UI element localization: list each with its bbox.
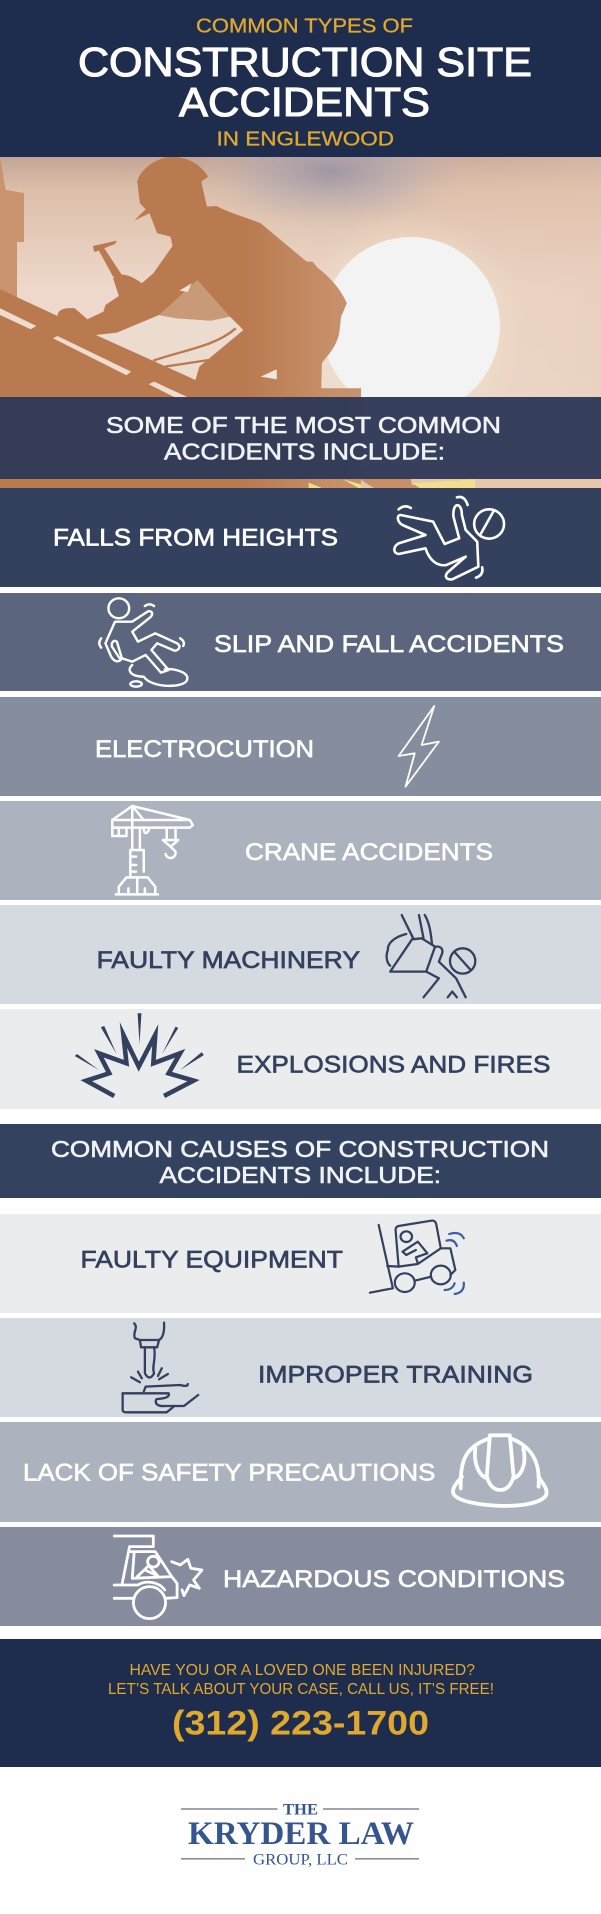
panel: roofer silhouette photo: [0, 157, 601, 488]
panel: improper training: [0, 1318, 601, 1417]
icon: vehicle collision: [114, 1536, 202, 1619]
banner heading: ACCIDENTS INCLUDE:: [160, 1162, 441, 1188]
panel: crane accidents: CRANE ACCIDENTS: [245, 839, 493, 866]
call to action text: HAVE YOU OR A LOVED ONE BEEN INJURED?: [130, 1662, 475, 1679]
roofer silhouette: [0, 157, 601, 488]
icon: hard hat: [453, 1435, 547, 1506]
icon: explosion burst: [75, 1013, 204, 1096]
icon: falling person: [394, 497, 504, 579]
panel: falls from heights: [0, 488, 601, 587]
rope: [153, 328, 236, 367]
panel: lack of safety precautions: LACK OF SAFETY PRECAUTIONS: [23, 1460, 435, 1487]
call to action text: [108, 1662, 494, 1698]
panel: slip and fall accidents: SLIP AND FALL ACCIDENTS: [214, 631, 564, 658]
banner heading: ACCIDENTS INCLUDE:: [164, 438, 445, 464]
panel: slip and fall accidents: [0, 593, 601, 691]
icon: tower crane: [112, 806, 193, 894]
logo: the kryder law group: GROUP, LLC: [253, 1852, 348, 1869]
panel: falls from heights: FALLS FROM HEIGHTS: [53, 525, 338, 552]
panel: common causes banner: [0, 1124, 601, 1198]
banner heading: [51, 1136, 549, 1188]
panel: explosions and fires: [0, 1009, 601, 1109]
banner heading: COMMON CAUSES OF CONSTRUCTION: [51, 1136, 549, 1162]
icon: drill and hand: [123, 1323, 198, 1412]
panel: call to action: [0, 1639, 601, 1767]
panel: faulty machinery: [0, 905, 601, 1004]
panel: faulty equipment: FAULTY EQUIPMENT: [80, 1247, 343, 1274]
panel: hazardous conditions: HAZARDOUS CONDITIONS: [223, 1566, 565, 1593]
title: [78, 39, 532, 125]
lower light strips: [308, 479, 362, 488]
icon detail: motion arcs: [445, 1233, 464, 1294]
logo: the kryder law group: THE: [283, 1802, 318, 1819]
panel: improper training: IMPROPER TRAINING: [258, 1362, 533, 1389]
title: CONSTRUCTION SITE: [78, 39, 532, 85]
sun: [328, 237, 500, 397]
panel: lack of safety precautions: [0, 1422, 601, 1522]
logo: the kryder law group: KRYDER LAW: [188, 1816, 414, 1852]
panel: explosions and fires: EXPLOSIONS AND FIRES: [236, 1052, 550, 1079]
panel: hazardous conditions: [0, 1527, 601, 1626]
building: [0, 157, 24, 300]
icon: falling load on worker: [387, 915, 475, 997]
icon: forklift: [370, 1221, 464, 1294]
title: ACCIDENTS: [179, 79, 430, 125]
heading: in englewood: IN ENGLEWOOD: [216, 129, 394, 151]
panel: header: [0, 0, 601, 157]
banner heading: [106, 412, 501, 464]
panel: faulty machinery: FAULTY MACHINERY: [97, 947, 360, 974]
hammer: [93, 241, 122, 277]
panel: electrocution: ELECTROCUTION: [95, 736, 314, 763]
roof light strips: [0, 308, 188, 400]
panel: faulty equipment: [0, 1214, 601, 1313]
panel: most common accidents banner: [0, 397, 601, 479]
panel: electrocution: [0, 697, 601, 796]
icon: slipping person: [99, 598, 187, 687]
heading: common types of: COMMON TYPES OF: [196, 16, 413, 38]
icon: lightning bolt: [399, 706, 439, 787]
call to action text: LET’S TALK ABOUT YOUR CASE, CALL US, IT’S FREE!: [108, 1681, 494, 1698]
logo: the kryder law group: [181, 1802, 419, 1869]
panel: crane accidents: [0, 801, 601, 900]
phone number: (312) 223-1700: [172, 1704, 429, 1742]
banner heading: SOME OF THE MOST COMMON: [106, 412, 501, 438]
